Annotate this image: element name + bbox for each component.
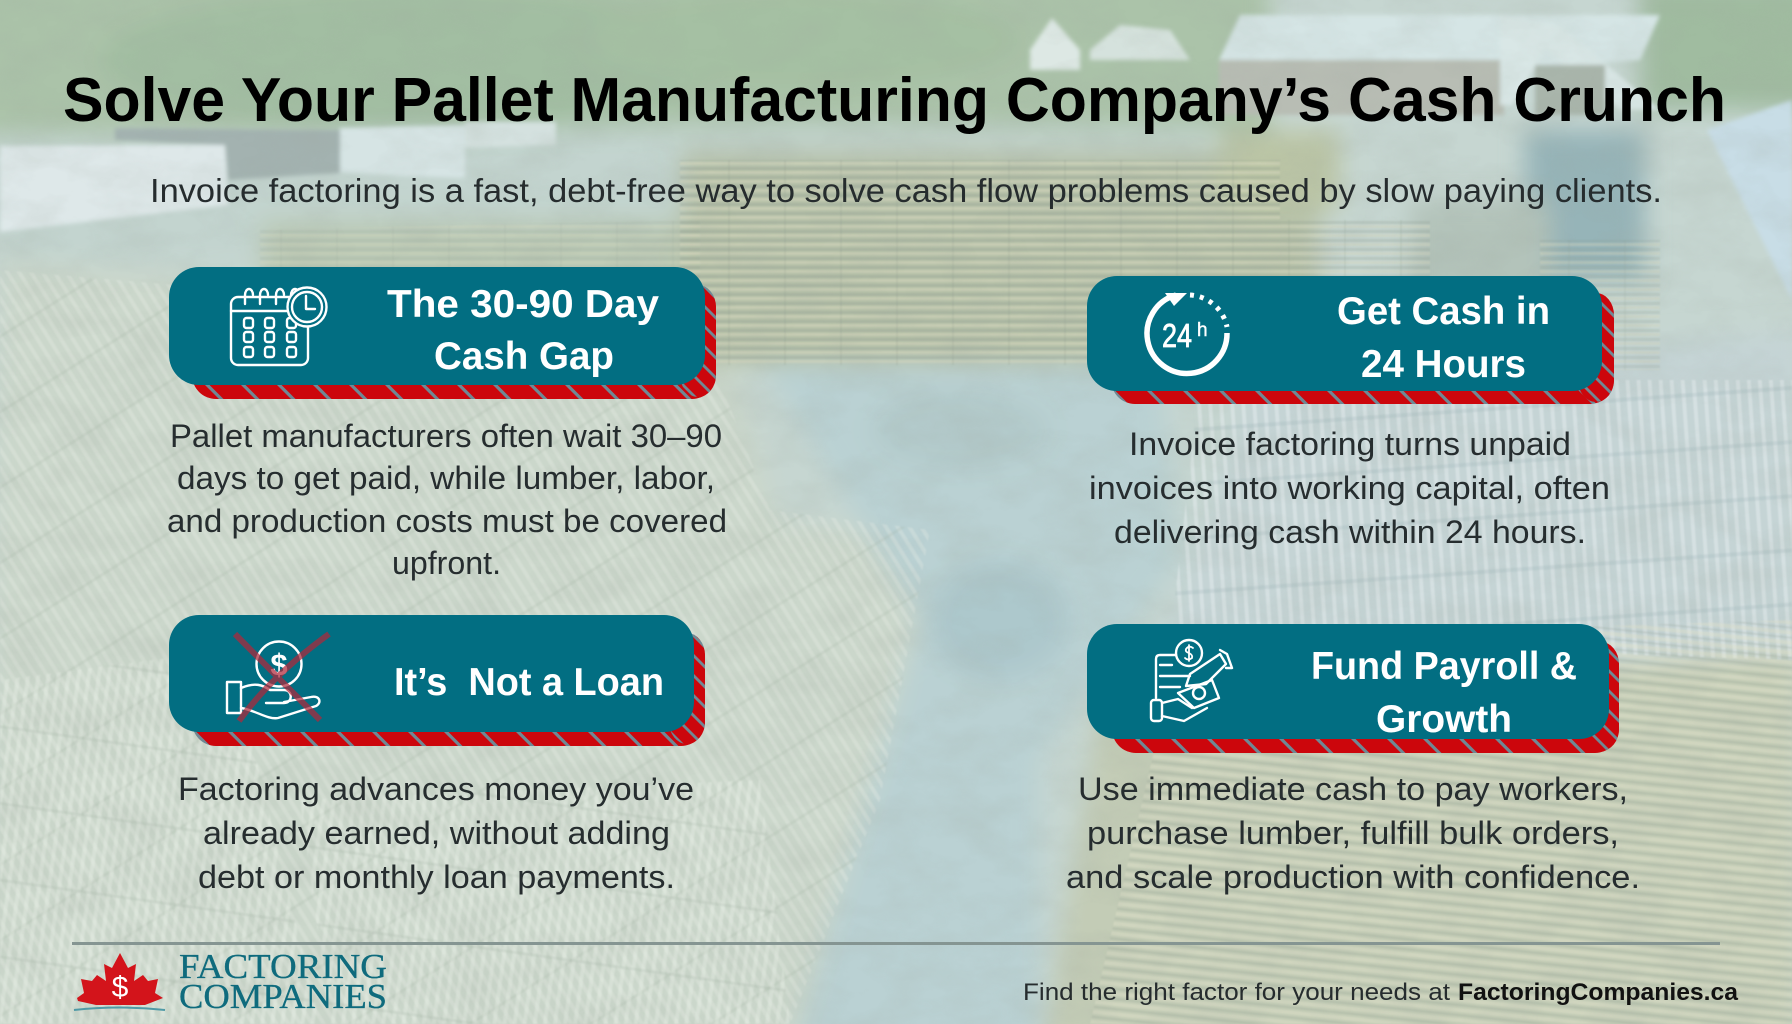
icon: hand with invoice and cash bbox=[1151, 640, 1232, 721]
icon: hand with coin crossed out: $ bbox=[270, 647, 288, 682]
body text 3 bbox=[178, 771, 694, 895]
icon: 24h clock bbox=[1147, 293, 1227, 373]
body text 4: and scale production with confidence. bbox=[1066, 859, 1640, 895]
body text 1: and production costs must be covered bbox=[167, 503, 727, 539]
subtitle: Invoice factoring is a fast, debt-free way to solve cash flow problems caused by slow paying clients. bbox=[150, 172, 1662, 209]
logo wordmark bbox=[179, 947, 387, 1016]
banner 2 bbox=[1087, 276, 1602, 391]
banner 1 bbox=[169, 267, 705, 385]
heading 1 bbox=[387, 283, 659, 378]
icon: calendar with clock bbox=[231, 288, 326, 365]
heading 3: It’s Not a Loan bbox=[394, 661, 664, 704]
heading 2: 24 Hours bbox=[1361, 343, 1526, 386]
body text 4: purchase lumber, fulfill bulk orders, bbox=[1087, 815, 1619, 851]
heading 4 bbox=[1311, 645, 1577, 741]
body text 4 bbox=[1066, 771, 1640, 895]
icon: hand with coin crossed out bbox=[227, 634, 329, 721]
body text 3: debt or monthly loan payments. bbox=[198, 859, 675, 895]
body text 2: Invoice factoring turns unpaid bbox=[1129, 426, 1571, 462]
panel: the 30-90 day cash gap bbox=[167, 267, 727, 581]
icon: 24h clock: 24 bbox=[1162, 317, 1192, 354]
footer call to action: Find the right factor for your needs at bbox=[1023, 979, 1450, 1006]
body text 3: Factoring advances money you’ve bbox=[178, 771, 694, 807]
banner 1 shadow bbox=[192, 285, 716, 399]
footer call to action: FactoringCompanies.ca bbox=[1458, 979, 1739, 1006]
body text 1 bbox=[167, 418, 727, 581]
body text 1: upfront. bbox=[392, 545, 501, 581]
body text 2: invoices into working capital, often bbox=[1089, 470, 1610, 506]
heading 1: Cash Gap bbox=[434, 335, 614, 378]
panel: get cash in 24 hours bbox=[1087, 276, 1614, 550]
heading 4: Growth bbox=[1376, 698, 1512, 741]
icon: maple leaf bbox=[74, 953, 165, 1010]
heading 4: Fund Payroll & bbox=[1311, 645, 1577, 688]
panel: it's not a loan bbox=[169, 615, 705, 895]
body text 4: Use immediate cash to pay workers, bbox=[1078, 771, 1628, 807]
banner 2 shadow bbox=[1111, 293, 1614, 404]
banner 3 shadow bbox=[192, 633, 705, 746]
banner 4 shadow bbox=[1112, 642, 1619, 753]
heading 2 bbox=[1337, 290, 1550, 386]
banner 4 bbox=[1087, 624, 1609, 739]
body text 3: already earned, without adding bbox=[203, 815, 670, 851]
icon: maple leaf: $ bbox=[112, 971, 129, 1004]
body text 1: days to get paid, while lumber, labor, bbox=[177, 460, 715, 496]
body text 1: Pallet manufacturers often wait 30–90 bbox=[170, 418, 722, 454]
body text 2 bbox=[1089, 426, 1610, 550]
heading 1: The 30-90 Day bbox=[387, 283, 659, 326]
logo wordmark: COMPANIES bbox=[179, 977, 387, 1016]
banner 3 bbox=[169, 615, 694, 732]
footer call to action bbox=[1023, 979, 1739, 1006]
icon: 24h clock: h bbox=[1197, 320, 1208, 341]
logo wordmark: FACTORING bbox=[179, 947, 387, 986]
panel: fund payroll and growth bbox=[1066, 624, 1640, 895]
logo: factoring companies bbox=[74, 947, 387, 1016]
body text 2: delivering cash within 24 hours. bbox=[1114, 514, 1586, 550]
heading 2: Get Cash in bbox=[1337, 290, 1550, 333]
title: Solve Your Pallet Manufacturing Company’s Cash Crunch bbox=[63, 66, 1726, 135]
